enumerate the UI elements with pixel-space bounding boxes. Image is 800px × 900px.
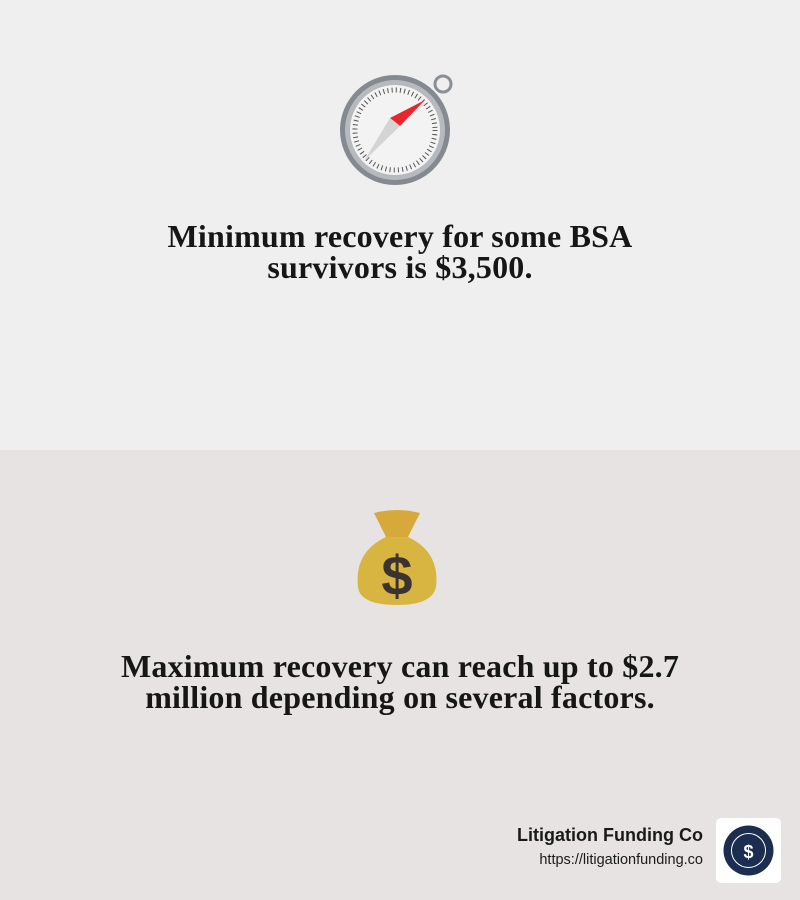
text: maximum recovery: million depending on several factors.	[145, 679, 655, 715]
panel: minimum recovery	[0, 0, 800, 450]
brand: Litigation Funding Co: Litigation Funding Co	[517, 825, 703, 845]
logo: $	[743, 842, 754, 862]
icon: money bag: $	[381, 544, 413, 607]
text: maximum recovery	[121, 648, 679, 715]
text: minimum recovery: Minimum recovery for some BSA	[168, 218, 632, 254]
panel: maximum recovery	[0, 450, 800, 900]
text: minimum recovery	[168, 218, 632, 285]
brand: Litigation Funding Co: https://litigationfunding.co	[539, 852, 703, 868]
icon: money bag	[358, 510, 436, 607]
logo	[716, 818, 781, 883]
brand: Litigation Funding Co	[517, 825, 703, 868]
icon: compass	[340, 74, 452, 185]
text: minimum recovery: survivors is $3,500.	[267, 249, 533, 285]
text: maximum recovery: Maximum recovery can reach up to $2.7	[121, 648, 679, 684]
